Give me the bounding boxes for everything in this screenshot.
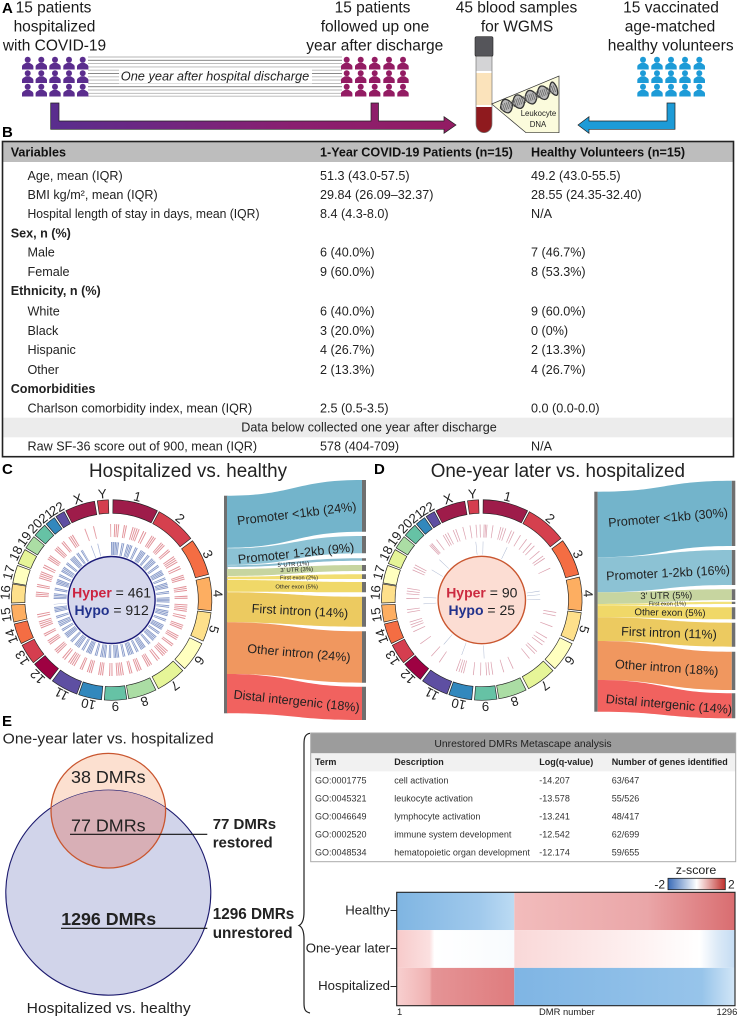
heading: healthy volunteers: healthy volunteers — [608, 38, 734, 55]
table rows — [315, 775, 639, 857]
table rows: -13.241 — [539, 811, 570, 821]
flow: 5 prime UTR — [227, 558, 362, 567]
icon: blood tube — [475, 37, 493, 134]
chromosome labels: 12 — [397, 666, 418, 687]
center counts: Hyper = 90 — [446, 584, 517, 600]
table rows: -14.207 — [539, 775, 570, 785]
row labels — [306, 902, 391, 993]
table body: Other — [28, 363, 59, 377]
flow: promoter 1-2kb — [598, 550, 732, 592]
count: 38 DMRs: 38 DMRs — [71, 767, 146, 787]
table body: Hispanic — [28, 343, 76, 357]
sankey labels: 3' UTR (3%) — [280, 567, 313, 574]
center counts: Hypo = 25 — [449, 602, 515, 618]
chromosome labels: 3 — [570, 548, 586, 561]
sankey labels: Distal intergenic (18%) — [233, 688, 360, 715]
table body: Hospital length of stay in days, mean (IQR) — [28, 207, 260, 221]
chromosome labels: 11 — [422, 684, 441, 704]
panel label D: D — [374, 461, 385, 478]
axis labels: 1 — [397, 1006, 402, 1017]
arrow: volunteers to blood samples — [578, 103, 675, 133]
flow: 3 prime UTR — [227, 565, 362, 576]
chromosome labels: 20 — [24, 516, 45, 537]
chromosome labels — [0, 486, 226, 714]
table body: 6 (40.0%) — [320, 246, 375, 260]
center counts: Hypo = 912 — [74, 602, 149, 618]
sankey labels: Promoter 1-2kb (9%) — [237, 540, 355, 567]
sankey labels: Distal intergenic (14%) — [605, 692, 733, 717]
sankey labels — [233, 500, 360, 715]
panel D: one-year later vs hospitalized — [350, 461, 735, 732]
table body: Female — [28, 265, 70, 279]
table rows: GO:0046649 — [315, 811, 367, 821]
chromosome labels: Y — [97, 486, 108, 502]
heading: followed up patients: 15 patients — [335, 0, 411, 17]
row labels: Healthy — [345, 902, 390, 917]
table body: 4 (26.7%) — [320, 343, 375, 357]
table title: Unrestored DMRs Metascape analysis — [434, 739, 612, 750]
column header band — [311, 753, 736, 771]
gap masks — [17, 505, 207, 695]
table body: 9 (60.0%) — [531, 305, 586, 319]
hypomethylated ticks — [429, 547, 535, 653]
table header row: 1-Year COVID-19 Patients (n=15) — [320, 146, 513, 160]
chromosome labels: 4 — [580, 589, 596, 598]
table rows: 55/526 — [612, 794, 639, 804]
center circle — [68, 556, 155, 644]
table body: 0.0 (0.0-0.0) — [531, 401, 600, 415]
chromosome labels: 5 — [576, 624, 592, 635]
table note band — [3, 418, 733, 437]
sankey labels: First intron (11%) — [621, 625, 717, 642]
count: 77 DMRs: 77 DMRs — [71, 816, 146, 836]
row labels: Hospitalized — [318, 978, 390, 993]
panel C: hospitalized vs healthy — [0, 461, 366, 732]
table body: Age, mean (IQR) — [28, 169, 123, 183]
chromosome labels: 6 — [561, 653, 578, 668]
chromosome labels: 1 — [132, 488, 143, 505]
table body: 3 (20.0%) — [320, 324, 375, 338]
heading: blood samples: 45 blood samples — [456, 0, 577, 17]
flow: promoter 1-2kb — [227, 536, 362, 565]
chromosome labels: 10 — [80, 695, 97, 713]
flow: other intron — [598, 641, 732, 690]
sankey labels — [605, 506, 733, 717]
chromosome labels: 20 — [395, 516, 416, 537]
icon group: healthy volunteers — [637, 57, 705, 96]
table rows: lymphocyte activation — [394, 811, 480, 821]
sankey labels: Other intron (18%) — [615, 657, 719, 678]
chromosome labels: 15 — [368, 607, 385, 623]
column headers: Description — [394, 757, 444, 767]
table body: Ethnicity, n (%) — [11, 284, 101, 298]
circos plot D — [350, 468, 614, 732]
callout: restored: restored — [213, 835, 273, 852]
table rows: immune system development — [394, 829, 512, 839]
table body: 9 (60.0%) — [320, 265, 375, 279]
count: 1296 DMRs: 1296 DMRs — [61, 909, 156, 929]
chromosome labels: 7 — [538, 677, 553, 694]
chromosome labels: 11 — [52, 684, 71, 704]
chromosome ring — [350, 468, 614, 732]
brace — [299, 733, 310, 1013]
chromosome labels: 8 — [509, 693, 521, 710]
heading: healthy volunteers: 15 vaccinated — [623, 0, 719, 17]
row ticks — [390, 910, 397, 986]
table rows: GO:0048534 — [315, 847, 367, 857]
axis labels: 1296 — [716, 1006, 737, 1017]
chromosome labels: 10 — [450, 695, 468, 713]
sankey labels: First exon (1%) — [649, 602, 686, 608]
table title band — [311, 733, 736, 753]
table header row: Healthy Volunteers (n=15) — [531, 146, 685, 160]
flow: other exon — [227, 580, 362, 592]
chromosome labels: Y — [467, 486, 478, 502]
chromosome labels: 9 — [111, 699, 119, 714]
callout: unrestored: unrestored — [213, 925, 293, 942]
chromosome labels: 13 — [382, 648, 403, 668]
table body: Charlson comorbidity index, mean (IQR) — [28, 401, 252, 415]
callout: unrestored: 1296 DMRs — [213, 906, 294, 923]
overlap region — [52, 790, 165, 868]
sankey bars — [224, 480, 366, 720]
table body: Male — [28, 246, 55, 260]
sankey D — [594, 481, 735, 718]
chromosome labels: 3 — [199, 548, 216, 561]
chromosome ring — [0, 468, 244, 732]
circos plot C — [0, 468, 244, 732]
table rows: -12.174 — [539, 847, 570, 857]
table body: N/A — [531, 440, 553, 454]
sankey labels: Promoter <1kb (30%) — [608, 506, 728, 530]
table body: 51.3 (43.0-57.5) — [320, 169, 410, 183]
chromosome labels: 1 — [502, 488, 513, 505]
chromosome labels: 7 — [168, 677, 182, 694]
callout text: DNA — [530, 120, 547, 129]
sankey labels: Other intron (24%) — [247, 642, 351, 665]
axis labels: DMR number — [539, 1006, 595, 1017]
column headers: Term — [315, 757, 336, 767]
flow: other intron — [227, 622, 362, 683]
column headers: Log(q-value) — [539, 757, 593, 767]
table rows: -13.578 — [539, 794, 570, 804]
chromosome labels: 6 — [191, 653, 208, 668]
flow: first exon — [598, 602, 732, 606]
large circle — [6, 790, 211, 995]
center circle — [438, 556, 526, 644]
flow: distal intergenic — [227, 674, 362, 720]
table body: 2 (13.3%) — [531, 343, 586, 357]
panel label C: C — [2, 461, 13, 478]
arrow: patients to blood samples — [51, 103, 456, 133]
table body: 8 (53.3%) — [531, 265, 586, 279]
sankey labels: First intron (14%) — [251, 602, 349, 621]
table body: 4 (26.7%) — [531, 363, 586, 377]
table body: 2 (13.3%) — [320, 363, 375, 377]
chromosome labels: 9 — [482, 699, 489, 714]
icon group: hospitalized patients — [22, 57, 88, 96]
heading: healthy volunteers: age-matched — [625, 19, 715, 36]
table rows: 48/417 — [612, 811, 639, 821]
flow: promoter under 1kb — [598, 481, 732, 557]
sankey bars — [594, 481, 735, 718]
heading: followed up patients: year after discharge — [306, 38, 443, 55]
colour legend: z-score — [676, 863, 716, 877]
chromosome labels: 22 — [417, 499, 437, 519]
heatmap cells — [397, 892, 735, 1006]
column headers: Number of genes identified — [612, 757, 728, 767]
table rows: GO:0002520 — [315, 829, 367, 839]
icon: DNA helix — [498, 81, 559, 115]
table body: 7 (46.7%) — [531, 246, 586, 260]
callout text: Leukocyte — [521, 109, 556, 118]
panel C title: Hospitalized vs. healthy — [89, 461, 287, 482]
table frame — [311, 733, 736, 862]
table body: Black — [28, 324, 59, 338]
table rows: GO:0001775 — [315, 775, 367, 785]
table body — [11, 169, 642, 454]
heading: hospitalized patients: 15 patients — [16, 0, 92, 17]
table rows: hematopoietic organ development — [394, 847, 530, 857]
panel label B: B — [2, 124, 13, 141]
heading: hospitalized patients: hospitalized — [14, 19, 95, 36]
chromosome labels: 18 — [376, 543, 396, 563]
sankey labels: Other exon (5%) — [275, 585, 318, 591]
sparse ticks — [22, 510, 201, 690]
row labels: One-year later — [306, 940, 391, 955]
flow: first exon — [227, 574, 362, 579]
heatmap frame — [397, 892, 735, 1006]
flow: first intron — [598, 617, 732, 647]
colour legend: 2 — [728, 878, 735, 892]
hypomethylated ticks — [58, 547, 165, 653]
panel label E: E — [2, 713, 12, 730]
table body: White — [28, 305, 60, 319]
panel D title: One-year later vs. hospitalized — [431, 461, 685, 482]
heatmap — [306, 863, 737, 1017]
sankey labels: 3' UTR (5%) — [640, 590, 692, 602]
chromosome labels: X — [441, 490, 455, 508]
small circle outline — [51, 753, 166, 868]
chromosome labels: 4 — [210, 589, 226, 598]
panel E: venn and unrestored analysis — [2, 713, 737, 1017]
venn title top: One-year later vs. hospitalized — [3, 731, 214, 747]
table body: Raw SF-36 score out of 900, mean (IQR) — [28, 440, 257, 454]
timeline lines — [88, 57, 342, 96]
flow: 3 prime UTR — [598, 589, 732, 604]
table body: 0 (0%) — [531, 324, 568, 338]
callout: leukocyte DNA — [492, 76, 559, 133]
table body: Data below collected one year after discharge — [241, 420, 497, 434]
chromosome labels: 21 — [406, 506, 427, 527]
colour legend: -2 — [654, 878, 665, 892]
leader line: restored — [70, 833, 207, 835]
table rows: 59/655 — [612, 847, 639, 857]
chromosome labels: 17 — [370, 563, 388, 581]
chromosome labels: 18 — [6, 543, 26, 563]
chromosome labels: 14 — [2, 627, 21, 646]
chromosome labels: 17 — [0, 563, 18, 581]
sankey labels: Promoter 1-2kb (16%) — [606, 563, 730, 583]
table body: Sex, n (%) — [11, 227, 71, 241]
panel A: study design — [2, 0, 734, 134]
table frame — [2, 142, 734, 457]
sankey labels: First exon (2%) — [280, 575, 318, 581]
sankey labels: Other exon (5%) — [634, 607, 706, 619]
flow: distal intergenic — [598, 680, 732, 718]
venn title bottom: Hospitalized vs. healthy — [27, 1001, 191, 1017]
heading: followed up patients: followed up one — [321, 19, 429, 36]
chromosome labels: 12 — [27, 666, 48, 687]
table rows: -12.542 — [539, 829, 570, 839]
hypermethylated ticks — [411, 529, 553, 671]
table rows: cell activation — [394, 775, 448, 785]
table body: 49.2 (43.0-55.5) — [531, 169, 621, 183]
table body: N/A — [531, 207, 553, 221]
chromosome labels — [368, 486, 596, 714]
chromosome labels: 8 — [139, 693, 150, 710]
table rows: 63/647 — [612, 775, 639, 785]
chromosome labels: 19 — [384, 529, 405, 549]
callout: restored: 77 DMRs — [213, 816, 276, 833]
chromosome labels: 5 — [206, 624, 222, 635]
table body: BMI kg/m², mean (IQR) — [28, 188, 158, 202]
timeline label: One year after hospital discharge — [121, 68, 309, 84]
sankey C — [224, 480, 366, 720]
chromosome labels: X — [71, 490, 85, 508]
chromosome labels: 19 — [14, 529, 35, 549]
table rows: leukocyte activation — [394, 794, 473, 804]
table header row: Variables — [11, 146, 66, 160]
chromosome labels: 14 — [372, 627, 391, 646]
sankey labels: Promoter <1kb (24%) — [236, 500, 357, 528]
table body: 6 (40.0%) — [320, 305, 375, 319]
table rows: 62/699 — [612, 829, 639, 839]
table body: 28.55 (24.35-32.40) — [531, 188, 642, 202]
leader line: unrestored — [61, 927, 207, 929]
hypermethylated ticks — [40, 528, 183, 672]
colour legend — [654, 863, 735, 892]
icon group: followed up patients — [341, 57, 409, 96]
chromosome labels: 2 — [543, 510, 558, 527]
chromosome labels: 13 — [12, 648, 33, 668]
sankey labels: 5' UTR (1%) — [277, 561, 309, 569]
small circle fill — [51, 753, 166, 868]
table body: 578 (404-709) — [320, 440, 399, 454]
chromosome labels: 22 — [47, 499, 67, 519]
heading: hospitalized patients: with COVID-19 — [2, 38, 106, 55]
panel label A: A — [2, 0, 13, 17]
flow: other exon — [598, 606, 732, 619]
metascape table — [311, 733, 736, 862]
flow: promoter under 1kb — [227, 480, 362, 548]
table body: 2.5 (0.5-3.5) — [320, 401, 389, 415]
flow: first intron — [227, 592, 362, 627]
table body: 29.84 (26.09–32.37) — [320, 188, 433, 202]
center counts: Hyper = 461 — [72, 584, 151, 600]
chromosome labels: 21 — [36, 506, 56, 527]
venn diagram — [6, 753, 211, 995]
chromosome labels: 2 — [172, 510, 188, 527]
table rows: GO:0045321 — [315, 794, 367, 804]
table header band — [3, 142, 733, 162]
chromosome labels: 16 — [368, 585, 384, 600]
panel B: demographics table — [2, 124, 734, 457]
table body: 8.4 (4.3-8.0) — [320, 207, 389, 221]
heading: blood samples: for WGMS — [481, 19, 553, 36]
table body: Comorbidities — [11, 382, 95, 396]
